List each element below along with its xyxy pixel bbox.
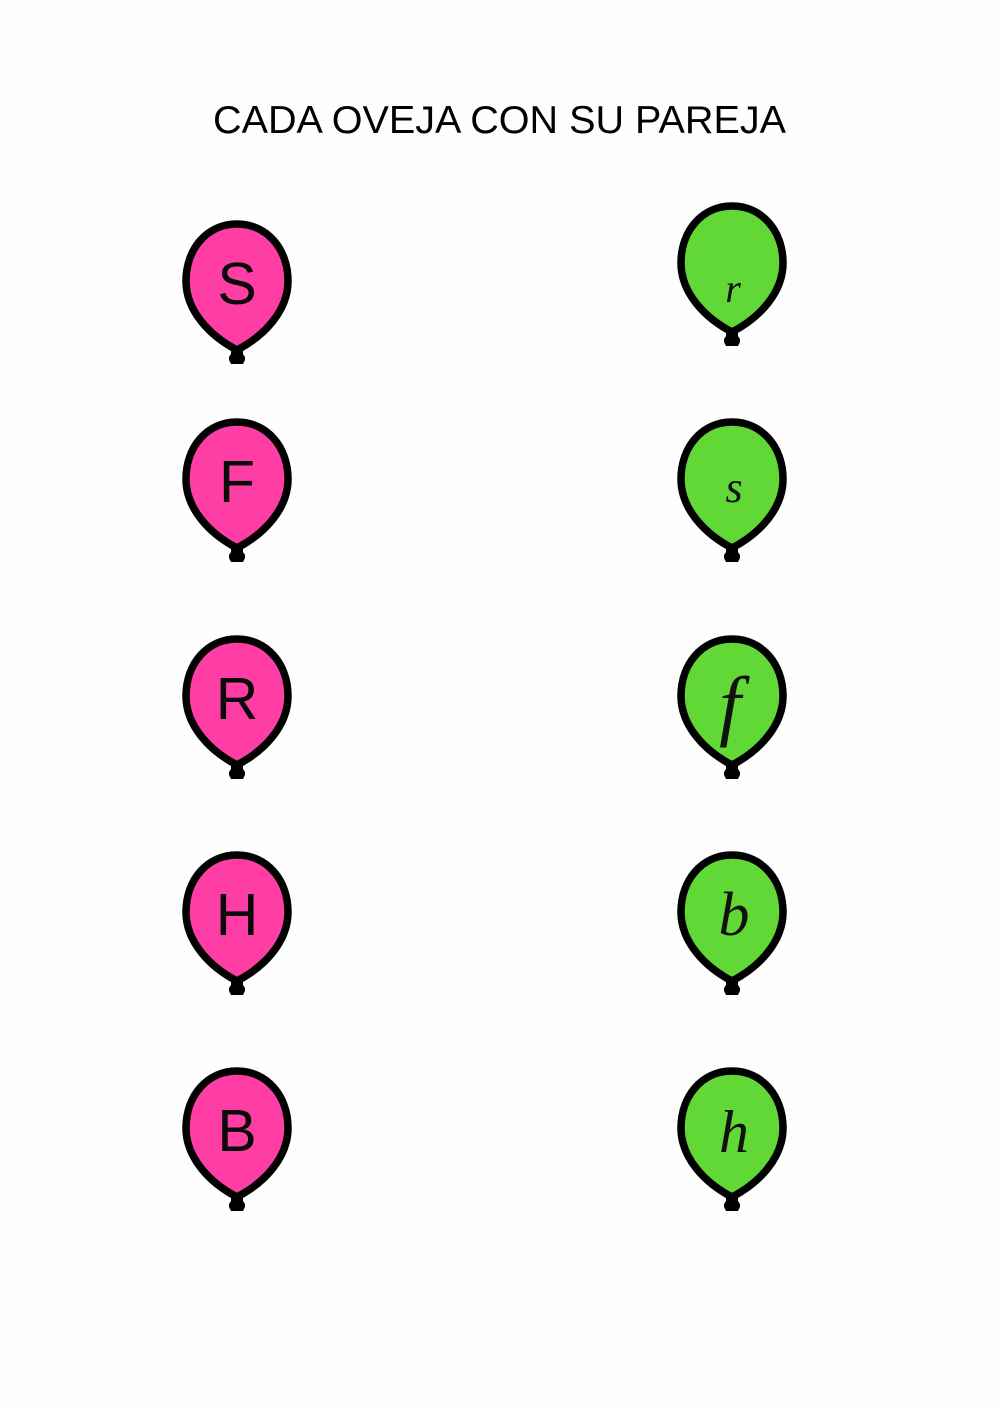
balloon: pink F <box>186 422 288 562</box>
balloon: green h <box>681 1071 783 1211</box>
balloon: green h: h <box>719 1099 749 1165</box>
balloon: pink S <box>186 224 288 364</box>
balloon: pink B: B <box>217 1098 257 1164</box>
balloon: green b: b <box>718 881 750 949</box>
balloon: green r <box>681 206 783 346</box>
balloon: green s: s <box>725 463 743 512</box>
balloon: pink R <box>186 639 288 779</box>
balloon: pink S: S <box>217 251 257 317</box>
balloon: pink R: R <box>216 666 258 732</box>
balloon: pink H <box>186 855 288 995</box>
balloon: pink H: H <box>216 882 258 948</box>
balloon: pink B <box>186 1071 288 1211</box>
balloon: green s <box>681 422 783 562</box>
balloon: green f <box>681 639 783 779</box>
balloon: green f: f <box>719 661 750 748</box>
balloon: green r: r <box>725 266 741 311</box>
title: CADA OVEJA CON SU PAREJA <box>213 99 786 142</box>
balloon: green b <box>681 855 783 995</box>
balloon: pink F: F <box>219 449 255 515</box>
